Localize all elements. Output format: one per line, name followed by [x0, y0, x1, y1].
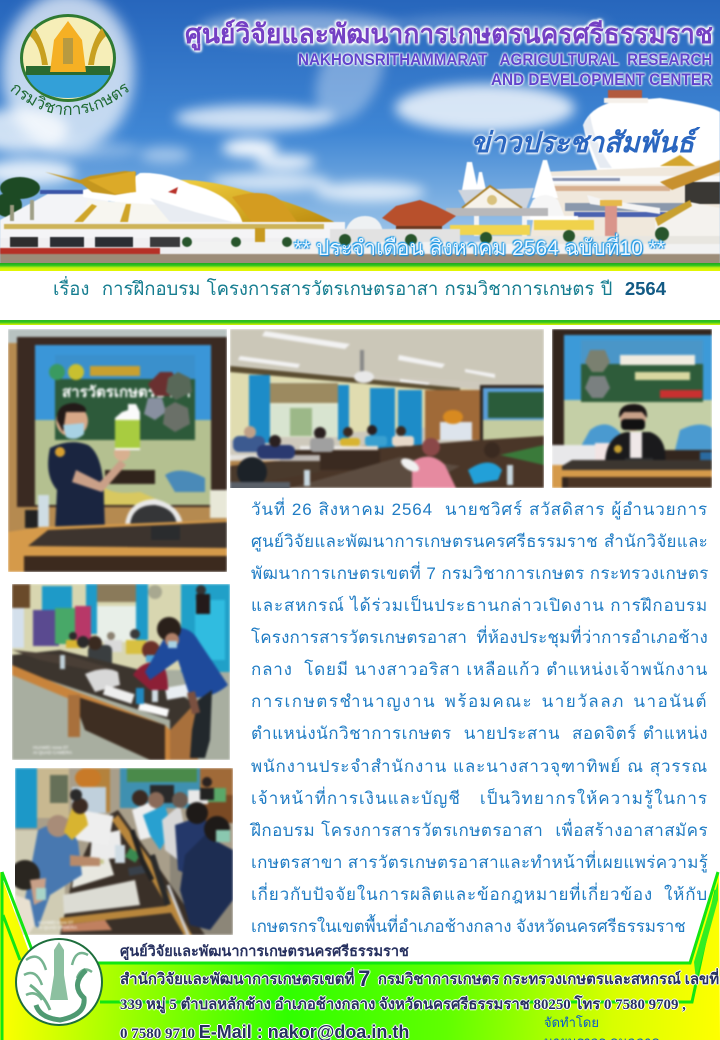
article body text: เกษตรสาขา สารวัตรเกษตรอาสาและทำหน้าที่เผยแพร่ความรู้ [251, 853, 708, 872]
bottle [115, 404, 140, 450]
water bottle [38, 495, 49, 527]
orange pavilion [382, 200, 456, 228]
logo: department of agriculture emblem [10, 14, 129, 115]
photo: speaker with product: สารวัตรเกษตรอาสา [62, 384, 191, 401]
photo: participants along table: HUAWEI nova 5T [38, 920, 74, 925]
footer organization name: ศูนย์วิจัยและพัฒนาการเกษตรนครศรีธรรมราช [120, 944, 409, 960]
desk [552, 465, 712, 477]
papers [72, 856, 114, 888]
chair [125, 499, 183, 525]
background people [69, 632, 77, 640]
back wall [425, 390, 480, 440]
story headline: เรื่อง การฝึกอบรม โครงการสารวัตรเกษตรอาสา กรมวิชาการเกษตร ปี 2564 [53, 278, 666, 299]
right people [132, 802, 160, 840]
photo: officer leaning over table [12, 584, 230, 760]
center title English line 2: AND DEVELOPMENT CENTER [491, 70, 712, 89]
pink woman [412, 457, 456, 488]
article body text: เกี่ยวกับปัจจัยในการผลิตและข้อกฎหมายที่เกี่ยวข้อง ให้กับ [251, 885, 708, 904]
article body text: วันที่ 26 สิงหาคม 2564 นายชวิศร์ สวัสดิสาร ผู้อำนวยการ [251, 500, 708, 519]
buddha white body [83, 173, 243, 224]
blue person [468, 462, 502, 484]
right building [530, 165, 720, 240]
center title English line 1: NAKHONSRITHAMMARAT AGRICULTURAL RESEARCH [298, 50, 712, 69]
article body text: โครงการสารวัตรเกษตรอาสา ที่ห้องประชุมที่ว่าการอำเภอช้าง [251, 628, 708, 647]
papers [85, 669, 120, 692]
article body text: กลาง โดยมี นางสาวอริสา เหลือแก้ว ตำแหน่งเจ้าพนักงาน [251, 660, 708, 679]
white dome [345, 216, 383, 232]
header banner photo [0, 0, 720, 263]
speaker [48, 442, 105, 530]
article body text: เกษตรกรในเขตพื้นที่อำเภอช้างกลาง จังหวัดนครศรีธรรมราช [251, 917, 686, 936]
photo: speaker with product [8, 329, 227, 572]
spires [462, 162, 478, 190]
foreground left person [15, 895, 35, 935]
photo: officer leaning over table: AI QUAD CAMERA [33, 750, 72, 755]
photo: officer at desk [552, 329, 712, 488]
palm [0, 177, 40, 199]
table [60, 810, 205, 935]
article body text: เจ้าหน้าที่การเงินและบัญชี เป็นวิทยากรให้ความรู้ในการ [251, 789, 708, 808]
press release heading: ข่าวประชาสัมพันธ์ [471, 127, 694, 158]
standing man [145, 628, 228, 698]
article body text: ศูนย์วิจัยและพัฒนาการเกษตรนครศรีธรรมราช สำนักวิจัยและ [251, 532, 708, 551]
seated people [233, 436, 295, 459]
article body text: การเกษตรชำนาญงาน พร้อมคณะ นายวัลลภ นาอนันต์ [251, 692, 708, 711]
woman [133, 662, 168, 690]
table [8, 520, 227, 562]
buddha hair and finial [45, 171, 136, 195]
article body text: พนักงานประจำสำนักงาน และนางสาวจุฑาทิพย์ ณ สุวรรณ [251, 757, 708, 776]
article body text [250, 498, 709, 936]
photo: participants along table [15, 768, 233, 935]
left people [22, 825, 82, 928]
buddha gold robe [170, 180, 342, 226]
article body text: พัฒนาการเกษตรเขตที่ 7 กรมวิชาการเกษตร กระทรวงเกษตร [251, 564, 709, 583]
issue date line: ** ประจำเดือน สิงหาคม 2564 ฉบับที่10 ** [294, 237, 665, 260]
chairs [132, 830, 152, 880]
shrubs [182, 227, 669, 247]
officer [605, 432, 665, 468]
tables [230, 436, 544, 488]
camera watermark: HUAWEI nova 5T [33, 745, 69, 750]
stupa [583, 98, 720, 172]
article body text: และสหกรณ์ ได้ร่วมเป็นประธานกล่าวเปิดงาน การฝึกอบรม [251, 596, 708, 615]
footer address line: 339 หมู่ 5 ตำบลหลักช้าง อำเภอช้างกลาง จังหวัดนครศรีธรรมราช 80250 โทร 0 7580 9709 , [120, 997, 686, 1013]
logo: department of agriculture emblem: กรมวิชาการเกษตร [10, 83, 129, 115]
article body text: ตำแหน่งนักวิชาการเกษตร นายประสาน สอดจิตร์ ตำแหน่ง [251, 724, 708, 743]
white temple [458, 188, 534, 212]
white wall right [190, 242, 720, 254]
clouds [0, 12, 610, 202]
green divider top [0, 263, 720, 271]
small stupa [532, 160, 558, 198]
footer green panel [0, 872, 720, 1040]
near head [237, 457, 267, 487]
footer emblem: naga and deity seal [15, 938, 103, 1026]
tables [12, 650, 197, 745]
photo: meeting room wide [230, 329, 544, 488]
curtains [249, 375, 422, 450]
green divider bottom [0, 320, 720, 325]
photo: participants along table: AI QUAD CAMERA [38, 925, 77, 930]
center title Thai: ศูนย์วิจัยและพัฒนาการเกษตรนครศรีธรรมราช [185, 19, 713, 49]
prepared by credit: จัดทำโดย [544, 1015, 599, 1030]
reclining buddha base [0, 190, 115, 228]
footer office line: สำนักวิจัยและพัฒนาการเกษตรเขตที่ 7 กรมวิชาการเกษตร กระทรวงเกษตรและสหกรณ์ เลขที่ [120, 966, 719, 991]
article body text: ฝึกอบรม โครงการสารวัตรเกษตรอาสา เพื่อสร้างอาสาสมัคร [251, 821, 708, 840]
terrace [0, 222, 345, 240]
